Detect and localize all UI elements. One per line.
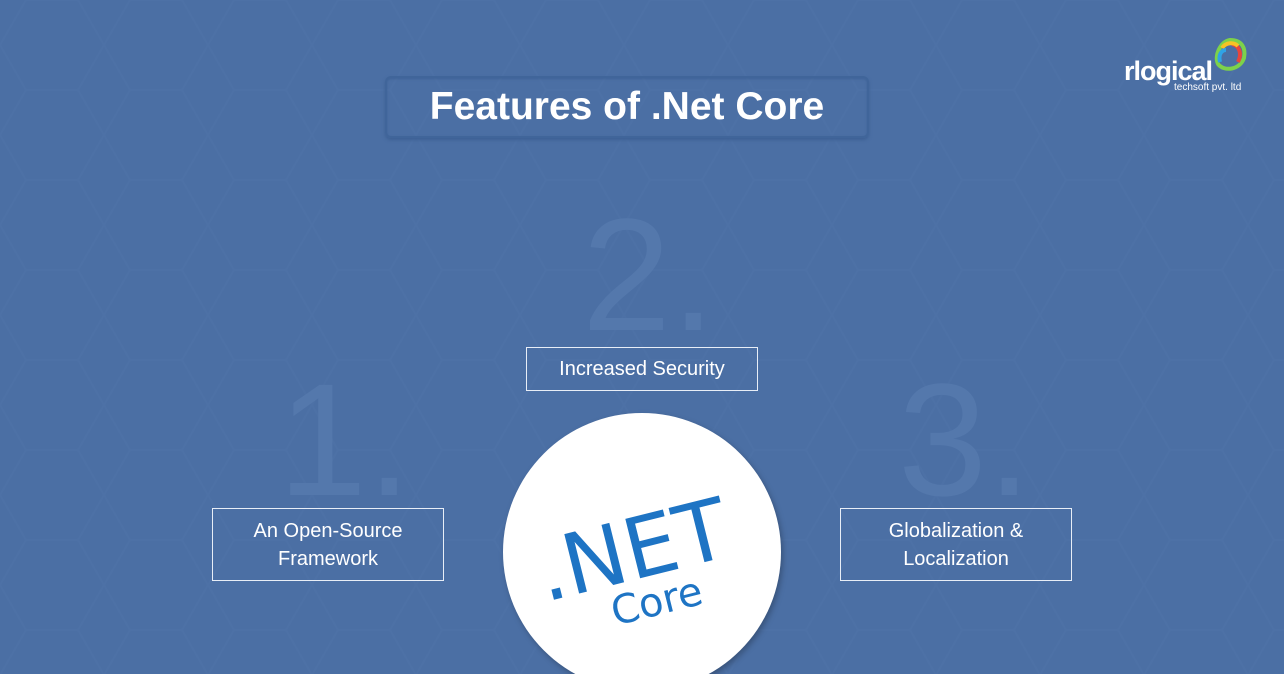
circle logo .NET Core [502, 413, 786, 674]
title: Features of .Net Core [430, 85, 824, 128]
number 2: 2. [582, 185, 715, 364]
box: Open-Source [212, 508, 444, 581]
box: Open-Source: An Open-Source [254, 520, 402, 542]
logo: rlogical [1124, 56, 1212, 86]
number 1: 1. [278, 350, 411, 529]
number 3: 3. [898, 350, 1031, 529]
circle logo .NET Core: Core [606, 568, 707, 635]
logo: techsoft pvt. ltd [1174, 82, 1241, 93]
box: Globalization [840, 508, 1072, 581]
box: Globalization: Globalization & [889, 520, 1023, 542]
box: Increased Security: Increased Security [559, 358, 725, 380]
box: Open-Source: Framework [278, 548, 378, 570]
box: Increased Security [526, 347, 758, 391]
logo [1124, 38, 1246, 93]
title [385, 76, 869, 138]
box: Globalization: Localization [903, 548, 1009, 570]
circle logo .NET Core: .NET [526, 479, 739, 621]
